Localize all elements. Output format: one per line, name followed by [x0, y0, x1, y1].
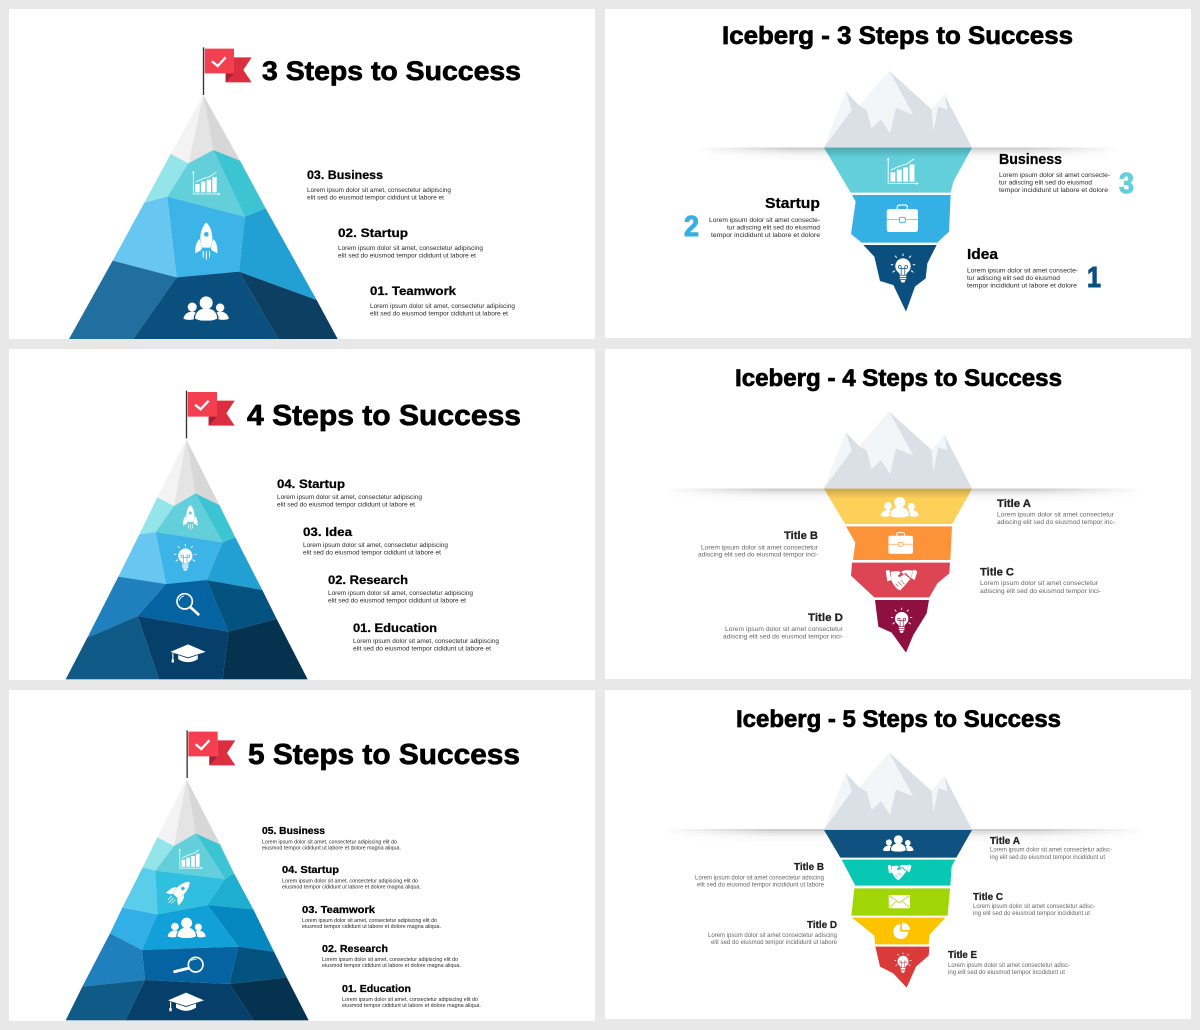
text: 01 education: 01. Education	[342, 984, 411, 995]
text: title b: adiscing elit sed do eiusmod tempor inci-	[698, 552, 818, 558]
panel: iceberg 3 steps	[605, 9, 1191, 338]
text: title a: ing elit sed do eiusmod tempor incididunt ut	[990, 855, 1105, 861]
text: 02 research	[322, 944, 461, 969]
text: startup	[709, 195, 820, 239]
text: 03 idea: Lorem ipsum dolor sit amet, consectetur adipiscing	[303, 542, 448, 549]
iceberg layer: title c	[851, 888, 950, 916]
iceberg chart: 5 layers	[824, 753, 972, 988]
pyramid layer: startup	[139, 493, 235, 542]
text: title a	[990, 836, 1112, 861]
text: title e: ing elit sed do eiusmod tempor incididunt ut	[948, 970, 1065, 976]
text: 02 startup: 02. Startup	[338, 226, 408, 240]
text: 03 idea: elit sed do eiusmod tempor cididunt ut labore et	[303, 550, 441, 556]
text: 03 teamwork	[302, 905, 441, 930]
text: business: Business	[999, 151, 1062, 168]
text: 02 research	[328, 573, 473, 604]
pyramid layer: teamwork	[69, 261, 338, 339]
icon: flag	[186, 730, 235, 778]
text: 01 education: Lorem ipsum dolor sit amet, consectetur adipiscing	[353, 638, 499, 645]
title: iceberg 3 steps: Iceberg - 3 Steps to Success	[722, 22, 1073, 50]
iceberg layer: title a	[824, 830, 972, 858]
number 3: 3	[1119, 168, 1134, 200]
text: 04 startup: elit sed do eiusmod tempor cididunt ut labore et	[277, 502, 415, 508]
water line	[698, 148, 1118, 160]
pyramid layer: startup	[122, 867, 253, 914]
text: 03 idea	[303, 525, 448, 556]
text: 01 education	[342, 984, 481, 1009]
water line	[664, 488, 1144, 500]
text: title c	[980, 566, 1101, 595]
iceberg layer: startup	[851, 195, 951, 243]
text: title a	[997, 498, 1115, 526]
text: title b	[695, 862, 825, 888]
pyramid layer: idea	[118, 532, 262, 590]
text: title d: elit sed do eiusmod tempor incididunt ut labore	[711, 940, 838, 946]
pyramid layer: research	[82, 933, 287, 987]
text: 05 business	[262, 826, 401, 852]
text: business	[999, 151, 1110, 194]
text: 02 startup: Lorem ipsum dolor sit amet, consectetur adipiscing	[338, 245, 483, 252]
water line	[664, 829, 1144, 841]
panel: pyramid 5 steps	[9, 690, 595, 1021]
text: 03 idea: 03. Idea	[303, 525, 352, 539]
title: 5 steps: 5 Steps to Success	[248, 739, 520, 771]
text: 05 business: 05. Business	[262, 826, 325, 837]
text: 01 education: 01. Education	[353, 621, 437, 635]
text: title c: Title C	[973, 892, 1003, 903]
pyramid layer: business	[143, 833, 234, 879]
iceberg layer: title a	[824, 489, 972, 524]
pyramid layer: research	[87, 577, 277, 638]
panel: iceberg 4 steps	[605, 349, 1191, 679]
iceberg layer: business	[824, 148, 972, 193]
text: 01 teamwork	[370, 284, 515, 318]
pyramid chart: 5 layers	[66, 730, 309, 1020]
text: startup: tur adiscing elit sed do eiusmod	[727, 224, 820, 232]
text: 01 education: eiusmod tempor cididunt ut labore et dolore magna aliqua.	[342, 1003, 481, 1009]
text: title a: Title A	[997, 498, 1031, 510]
text: title b: Title B	[794, 862, 824, 873]
text: idea: tempor incididunt ut labore et dolore	[967, 282, 1077, 290]
iceberg layer: title b	[842, 860, 955, 886]
text: 02 research: Lorem ipsum dolor sit amet, consectetur adipiscing	[328, 590, 473, 597]
number 2: 2	[684, 211, 699, 243]
text: title b: Lorem ipsum dolor sit amet consectetur	[701, 544, 819, 552]
text: title a: Title A	[990, 836, 1020, 847]
iceberg layer: title b	[846, 526, 952, 560]
panel: iceberg 5 steps	[605, 690, 1191, 1019]
text: title b: elit sed do eiusmod tempor incididunt ut labore	[697, 882, 825, 888]
text: title c: Lorem ipsum dolor sit amet consectetur	[980, 580, 1099, 587]
text: 04 startup: eiusmod tempor cididunt ut labore et dolore magna aliqua.	[282, 884, 421, 890]
iceberg layer: idea	[863, 245, 937, 312]
iceberg layer: title e	[875, 947, 929, 988]
text: 01 teamwork: Lorem ipsum dolor sit amet, consectetur adipiscing	[370, 303, 515, 310]
text: idea: tur adiscing elit sed do eiusmod	[967, 275, 1060, 282]
title: iceberg 5 steps: Iceberg - 5 Steps to Success	[736, 706, 1061, 733]
text: 02 research: elit sed do eiusmod tempor cididunt ut labore et	[328, 598, 466, 604]
text: 01 education: Lorem ipsum dolor sit amet, consectetur adipiscing elit do	[342, 997, 478, 1003]
pyramid chart: 4 layers	[66, 391, 308, 679]
text: 04 startup	[282, 865, 421, 890]
icon: flag	[203, 47, 252, 95]
text: 01 education	[353, 621, 499, 652]
panel: pyramid 4 steps	[9, 349, 595, 680]
title: 3 steps: 3 Steps to Success	[262, 56, 521, 86]
text: 03 teamwork: eiusmod tempor cididunt ut labore et dolore magna aliqua.	[302, 924, 441, 930]
text: title d	[708, 920, 838, 946]
pyramid layer: education	[66, 616, 308, 679]
pyramid chart: 3 layers	[69, 47, 338, 339]
text: 04 startup: 04. Startup	[282, 865, 339, 876]
text: 01 teamwork: 01. Teamwork	[370, 284, 456, 298]
text: 02 startup: elit sed do eiusmod tempor cididunt ut labore et	[338, 252, 476, 260]
pyramid layer: teamwork	[110, 905, 274, 952]
text: title a: adiscing elit sed do eiusmod tempor inc-	[997, 519, 1115, 526]
text: 02 startup	[338, 226, 483, 260]
text: 01 teamwork: elit sed do eiusmod tempor cididunt ut labore et	[370, 310, 508, 318]
icon: flag	[186, 391, 235, 438]
text: title c: Title C	[980, 566, 1014, 578]
iceberg layer: title d	[875, 600, 929, 653]
text: idea: Lorem ipsum dolor sit amet consecte-	[967, 268, 1078, 274]
text: business: tempor incididunt ut labore et dolore	[999, 187, 1108, 194]
iceberg layer: title c	[851, 563, 950, 597]
text: 03 teamwork: Lorem ipsum dolor sit amet, consectetur adipiscing elit do	[302, 918, 437, 924]
panel: pyramid 3 steps	[9, 9, 595, 339]
text: title e	[948, 950, 1070, 976]
text: title d: adiscing elit sed do eiusmod tempor inci-	[723, 634, 843, 640]
text: title c: adiscing elit sed do eiusmod tempor inci-	[980, 588, 1101, 595]
text: 04 startup: Lorem ipsum dolor sit amet, consectetur adipiscing elit do	[282, 878, 418, 884]
text: 02 research: eiusmod tempor cididunt ut labore et dolore magna aliqua.	[322, 963, 461, 969]
pyramid snow cap	[157, 779, 220, 846]
text: title a: Lorem ipsum dolor sit amet consectetur	[997, 512, 1115, 518]
number 1: 1	[1087, 262, 1101, 294]
text: business: Lorem ipsum dolor sit amet consecte-	[999, 172, 1110, 179]
text: startup: Startup	[765, 195, 820, 212]
text: 05 business: eiusmod tempor cididunt ut labore et dolore magna aliqua.	[262, 846, 401, 852]
title: iceberg 4 steps: Iceberg - 4 Steps to Success	[735, 365, 1062, 392]
text: 02 research: Lorem ipsum dolor sit amet, consectetur adipiscing elit do	[322, 957, 458, 963]
text: 04 startup: 04. Startup	[277, 477, 345, 491]
text: title c: Lorem ipsum dolor sit amet consectetur adisc-	[973, 904, 1095, 910]
text: title d: Lorem ipsum dolor sit amet consectetur adiscing	[708, 933, 837, 939]
text: 03 business: 03. Business	[307, 168, 383, 182]
text: title b: Lorem ipsum dolor sit amet consectetur adiscing	[695, 876, 824, 882]
text: 03 business: Lorem ipsum dolor sit amet, consectetur adipiscing	[307, 187, 451, 194]
title: 4 steps: 4 Steps to Success	[247, 400, 521, 432]
pyramid snow cap	[157, 439, 219, 506]
text: startup: Lorem ipsum dolor sit amet consecte-	[709, 217, 820, 224]
text: 04 startup	[277, 477, 422, 508]
text: 01 education: elit sed do eiusmod tempor cididunt ut labore et	[353, 646, 491, 652]
text: 03 business: elit sed do eiusmod tempor cididunt ut labore et	[307, 194, 444, 202]
iceberg chart: 3 layers	[824, 71, 972, 312]
text: 03 teamwork: 03. Teamwork	[302, 905, 375, 916]
text: title d: Lorem ipsum dolor sit amet consectetur	[725, 626, 844, 633]
iceberg top	[824, 412, 972, 488]
text: startup: tempor incididunt ut labore et dolore	[711, 232, 820, 239]
iceberg chart: 4 layers	[824, 412, 972, 653]
iceberg top	[824, 753, 972, 829]
pyramid layer: startup	[113, 197, 317, 300]
text: 04 startup: Lorem ipsum dolor sit amet, consectetur adipiscing	[277, 494, 422, 501]
text: title d	[723, 612, 844, 640]
text: 02 research: 02. Research	[322, 944, 388, 955]
text: title c: ing elit sed do eiusmod tempor incididunt ut	[973, 911, 1090, 917]
text: idea: Idea	[967, 246, 999, 263]
text: title d: Title D	[808, 612, 843, 624]
text: title d: Title D	[807, 920, 837, 931]
text: title c	[973, 892, 1095, 917]
text: title b	[698, 530, 819, 558]
text: title e: Lorem ipsum dolor sit amet consectetur adisc-	[948, 963, 1070, 969]
text: title e: Title E	[948, 950, 977, 961]
text: 03 business	[307, 168, 451, 202]
pyramid layer: business	[144, 150, 266, 217]
iceberg top	[824, 71, 972, 148]
text: 05 business: Lorem ipsum dolor sit amet, consectetur adipiscing elit do	[262, 840, 397, 846]
iceberg layer: title d	[852, 918, 945, 944]
text: idea	[967, 246, 1078, 290]
pyramid snow cap	[171, 95, 240, 163]
text: 02 research: 02. Research	[328, 573, 408, 587]
pyramid layer: education	[66, 977, 309, 1020]
text: title a: Lorem ipsum dolor sit amet consectetur adisc-	[990, 848, 1112, 854]
text: business: tur adiscing elit sed do eiusmod	[999, 180, 1092, 186]
text: title b: Title B	[784, 530, 818, 542]
